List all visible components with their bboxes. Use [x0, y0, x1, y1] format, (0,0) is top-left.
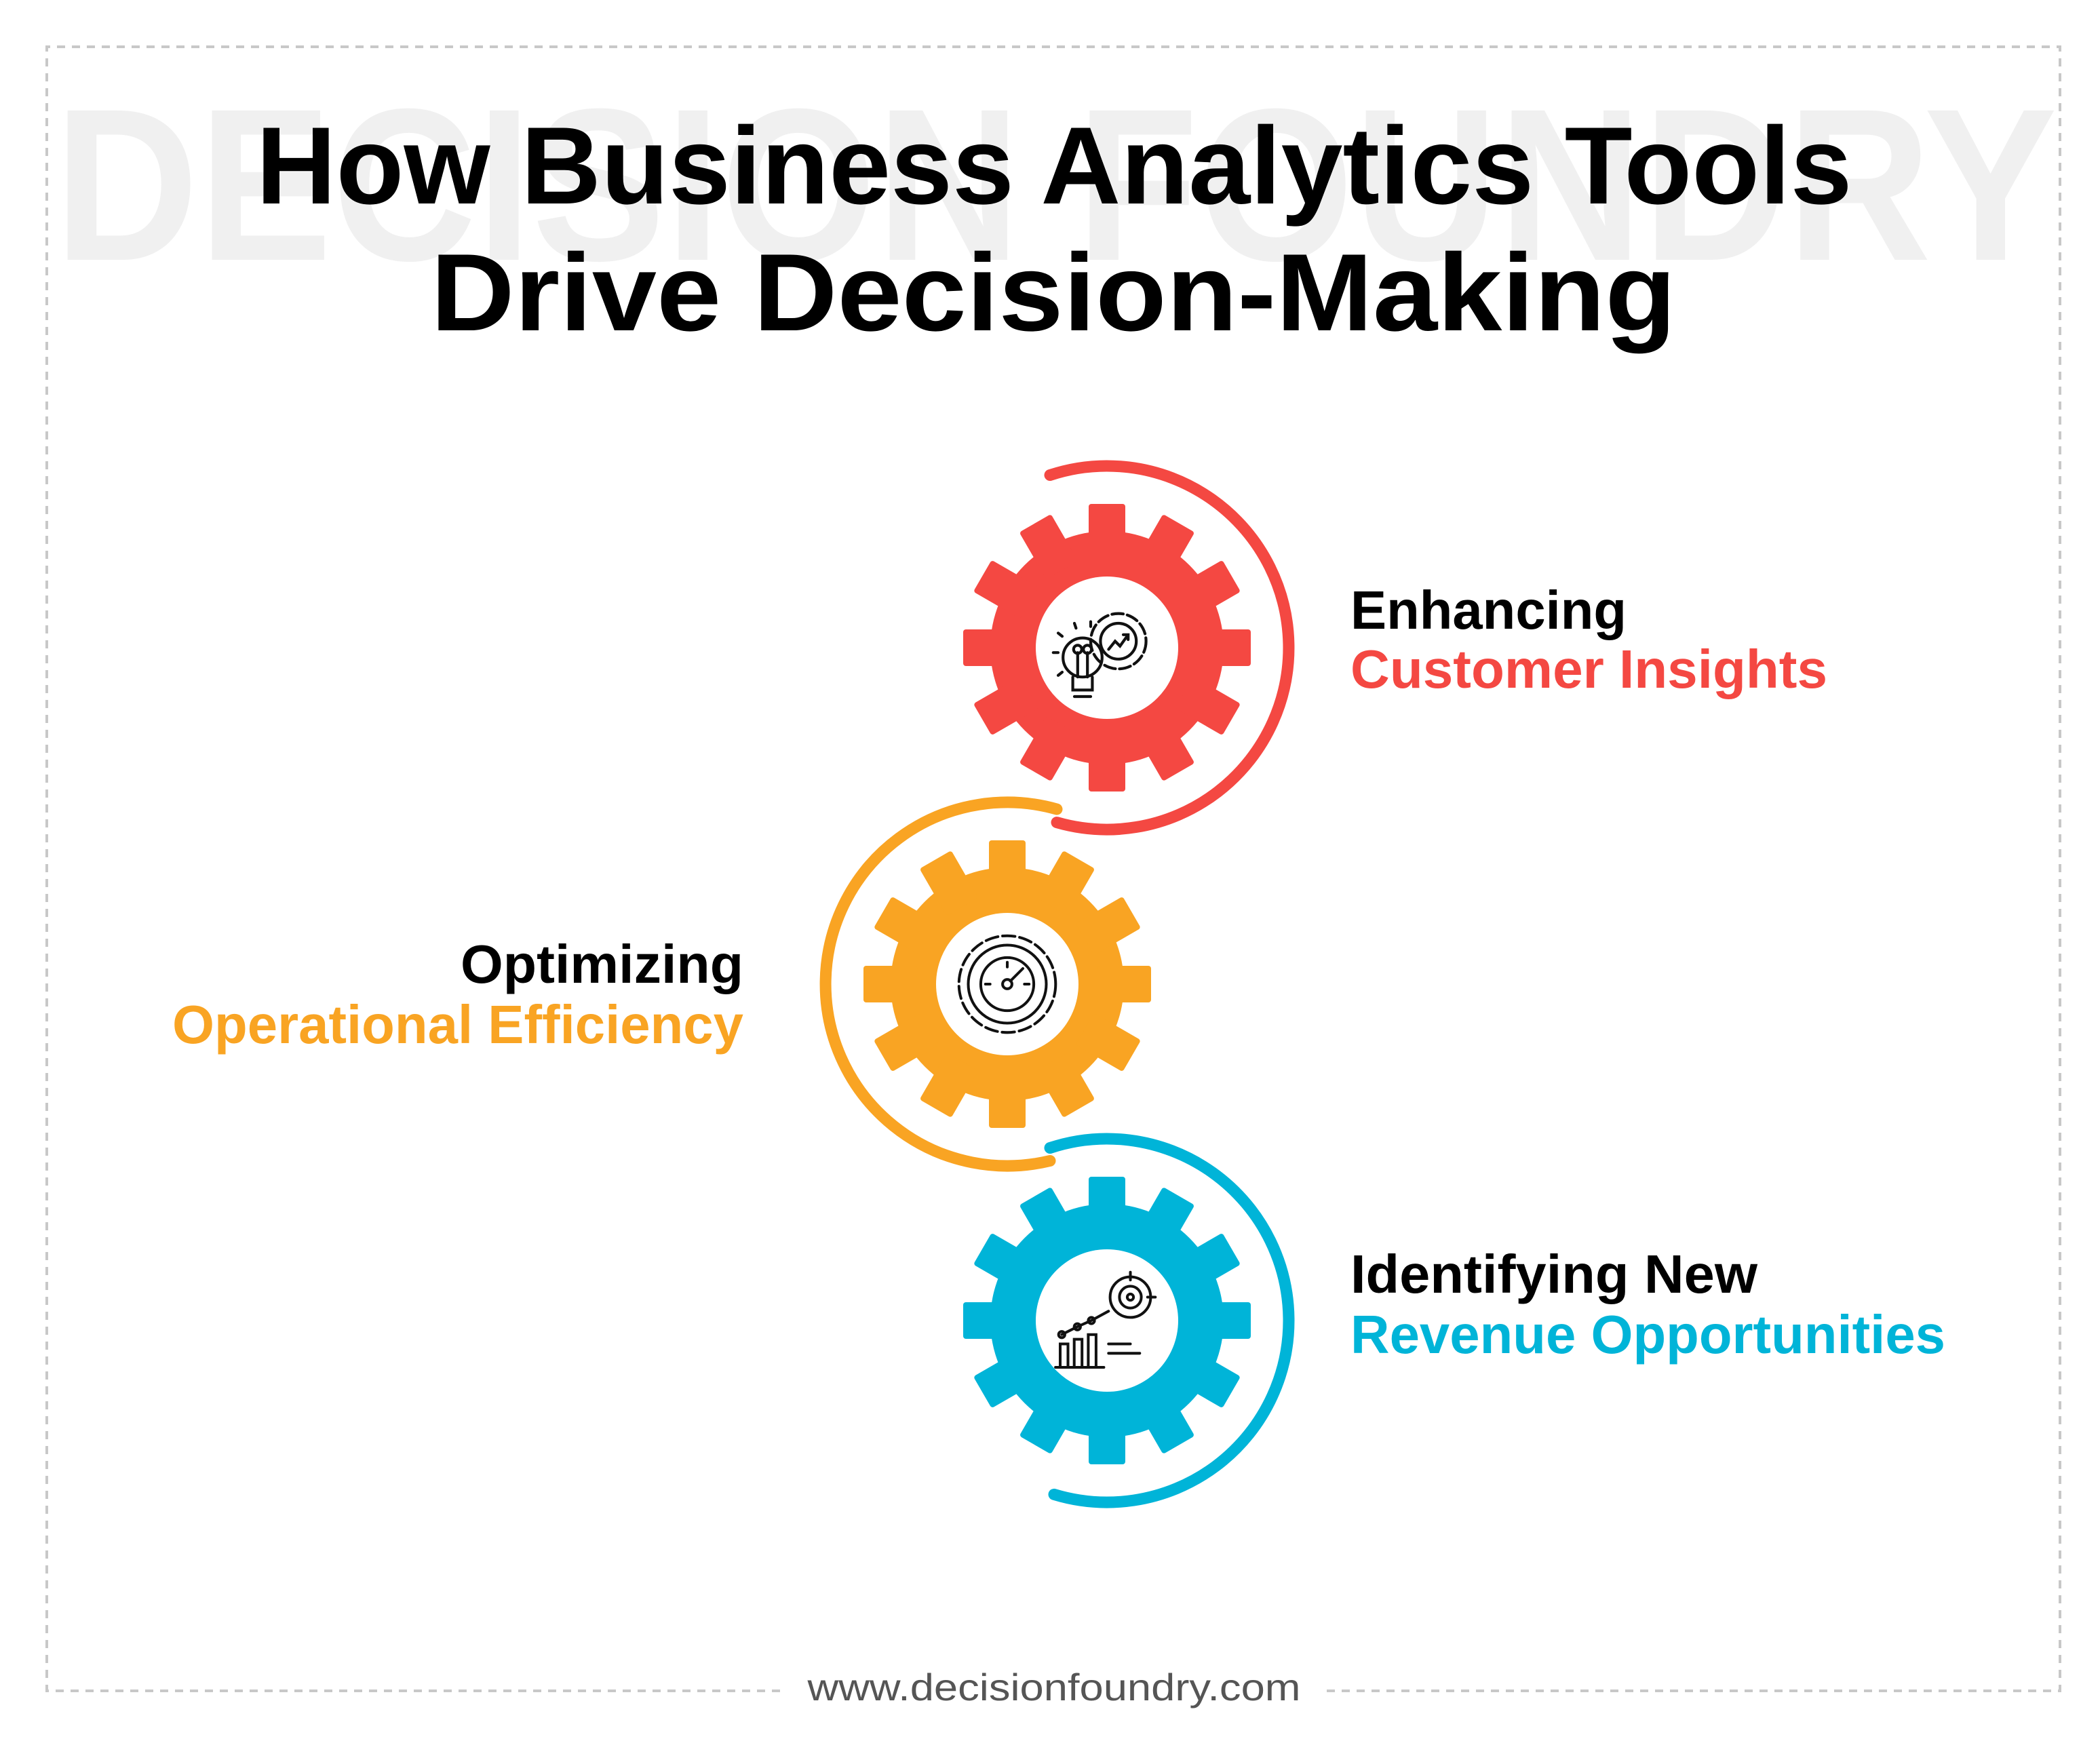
arc: orange: [825, 802, 1057, 1166]
title: Drive Decision-Making: [431, 231, 1676, 354]
text: operational efficiency: [172, 934, 744, 1055]
text: operational efficiency: Operational Efficiency: [172, 994, 744, 1055]
title: [256, 104, 1852, 354]
text: operational efficiency: Optimizing: [461, 934, 743, 994]
arc: blue: [1050, 1139, 1289, 1502]
text: revenue opportunities: Identifying New: [1350, 1244, 1758, 1304]
footer url: www.decisionfoundry.com: [806, 1666, 1301, 1708]
icon: bulb and gear: [1053, 614, 1146, 697]
gear: orange: [863, 840, 1151, 1128]
icon: speedometer gear: [959, 936, 1055, 1032]
title: How Business Analytics Tools: [256, 104, 1852, 227]
icon: chart and target: [1055, 1272, 1155, 1367]
gear: red: [963, 504, 1251, 792]
text: revenue opportunities: [1350, 1244, 1945, 1365]
text: customer insights: Enhancing: [1350, 580, 1627, 640]
text: customer insights: [1350, 580, 1827, 699]
text: revenue opportunities: Revenue Opportunities: [1350, 1304, 1945, 1365]
gear: blue: [963, 1177, 1251, 1464]
text: customer insights: Customer Insights: [1350, 639, 1827, 699]
arc: red: [1050, 466, 1289, 829]
